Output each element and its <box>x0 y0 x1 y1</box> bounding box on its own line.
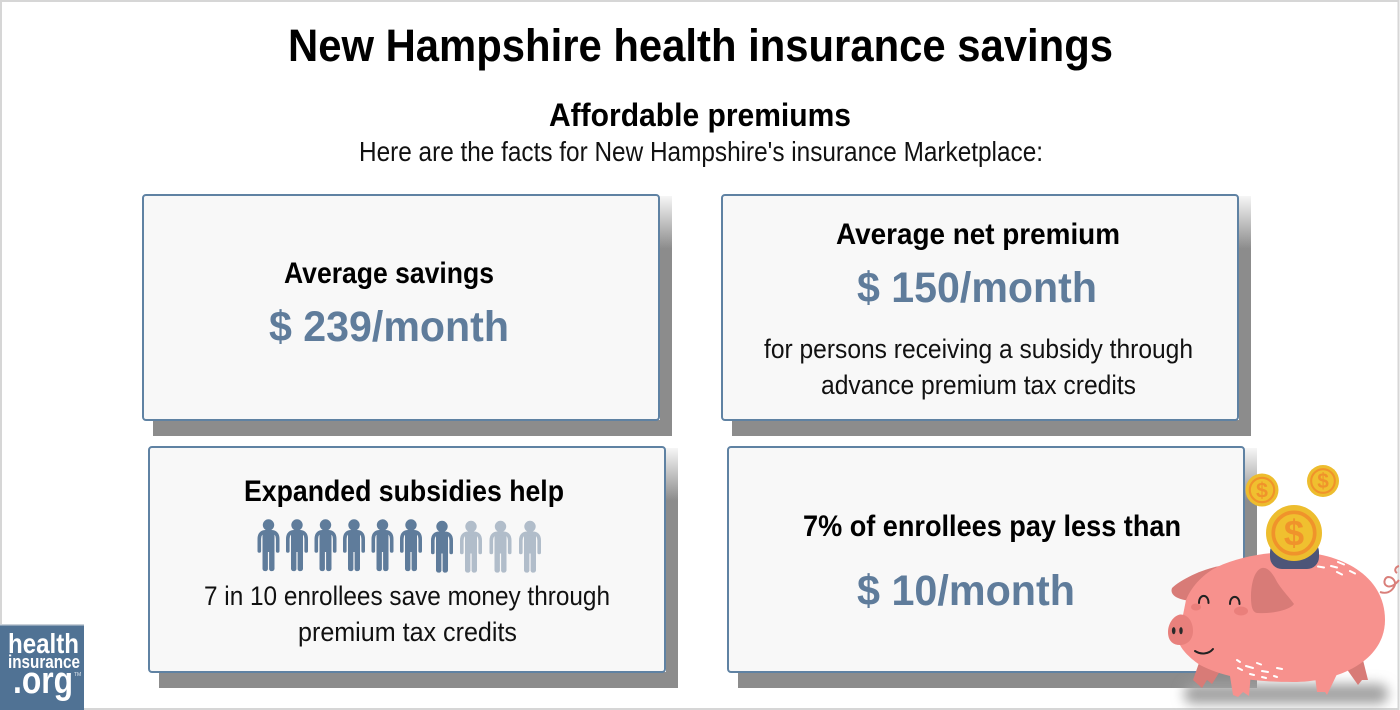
illustration: piggy bank <box>1168 465 1399 704</box>
description: 7 in 10: premium tax credits <box>298 617 517 647</box>
description: subsidy: for persons receiving a subsidy through <box>764 334 1193 364</box>
intro text: Here are the facts for New Hampshire's insurance Marketplace: <box>359 136 1043 167</box>
pig front legs <box>1229 670 1338 697</box>
coin: large: $ <box>1284 513 1304 554</box>
logo: healthinsurance.org: .org <box>13 660 73 702</box>
pictogram: 7 of 10 people <box>259 520 539 573</box>
pig back legs <box>1193 660 1368 688</box>
coin: large <box>1266 505 1322 561</box>
logo: healthinsurance.org <box>0 624 84 710</box>
heading: average savings: Average savings <box>284 257 494 290</box>
heading: expanded subsidies help: Expanded subsidies help <box>244 475 564 508</box>
eyes and smile <box>1195 596 1240 653</box>
description: subsidy: advance premium tax credits <box>821 370 1136 400</box>
subheading: Affordable premiums <box>549 97 851 133</box>
pig body <box>1178 552 1385 682</box>
title: New Hampshire health insurance savings <box>288 20 1113 71</box>
description: 7 in 10 <box>204 581 610 647</box>
heading: 7% of enrollees: 7% of enrollees pay less than <box>803 510 1181 543</box>
coin slot <box>1270 540 1319 569</box>
panel: average net premium <box>722 195 1251 436</box>
logo: healthinsurance.org: TM <box>74 672 81 678</box>
coin: upper left <box>1246 474 1278 506</box>
coin: upper right <box>1307 465 1339 497</box>
value: $10/month: $ 10/month <box>857 567 1075 615</box>
panel: expanded subsidies <box>149 447 678 688</box>
value: $150/month: $ 150/month <box>857 264 1097 312</box>
fur marks <box>1237 562 1355 678</box>
description: subsidy <box>764 334 1193 400</box>
nostrils <box>1172 627 1183 634</box>
coin: upper right: $ <box>1317 470 1329 493</box>
pig snout <box>1168 614 1193 645</box>
panel: average savings <box>143 195 672 436</box>
pig far ear <box>1172 566 1220 601</box>
pig tail <box>1380 566 1399 593</box>
panel: 7% of enrollees <box>728 447 1257 688</box>
pig near ear <box>1251 568 1294 613</box>
coin: upper left: $ <box>1256 478 1268 502</box>
logo: healthinsurance.org: health <box>8 628 79 659</box>
heading: average net premium: Average net premium <box>836 218 1120 251</box>
cheeks <box>1191 604 1248 616</box>
value: $239/month: $ 239/month <box>269 303 509 351</box>
ground shadow <box>1184 684 1388 704</box>
logo: healthinsurance.org: insurance <box>8 652 80 672</box>
description: 7 in 10: 7 in 10 enrollees save money through <box>204 581 610 611</box>
